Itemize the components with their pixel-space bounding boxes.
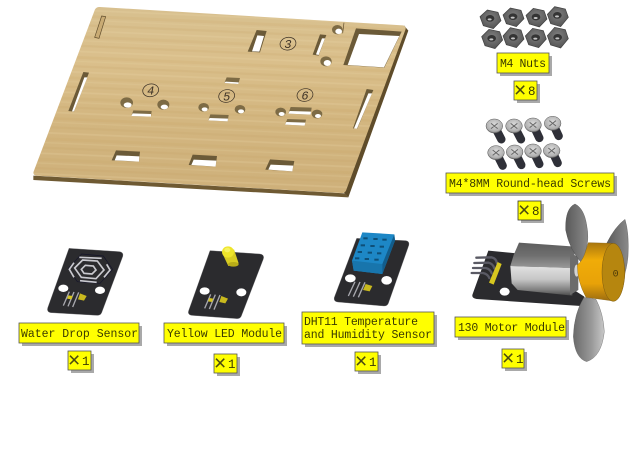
label: M4 Nuts: M4 Nuts <box>500 58 546 71</box>
pins <box>63 292 79 307</box>
header pins <box>472 257 497 278</box>
motor shaft <box>574 265 579 277</box>
M4 nuts <box>480 7 568 49</box>
M4*8MM round-head screws <box>486 116 561 166</box>
yellow LED module <box>188 246 264 319</box>
motor board <box>472 251 584 306</box>
DHT11 sensor <box>334 232 409 306</box>
group 5: 5 <box>223 90 230 104</box>
130 motor module <box>472 243 584 306</box>
label: DHT11 sensor <box>302 312 437 347</box>
label: x1 water <box>68 349 94 373</box>
group 4: 4 <box>147 85 154 99</box>
blade: upper right <box>607 219 628 280</box>
label: x1 DHT11: 1 <box>369 356 377 370</box>
label: x8 screws: × <box>518 199 530 222</box>
blue sensor housing <box>352 232 395 274</box>
label: x8 nuts <box>514 79 540 103</box>
motor rear cap <box>570 253 578 295</box>
label: yellow LED module <box>164 323 287 346</box>
label: x1 water: 1 <box>82 355 90 369</box>
label: x1 motor <box>502 347 527 371</box>
label: x1 motor: 1 <box>516 353 524 367</box>
label: M4*8MM screws: M4*8MM Round-head Screws <box>449 178 611 191</box>
number 3 <box>279 36 297 52</box>
label: DHT11 sensor: and Humidity Sensor <box>304 329 432 342</box>
label: x1 LED: × <box>214 352 226 375</box>
water drop sensor board <box>47 248 123 315</box>
LED bulb <box>222 246 239 267</box>
label: yellow LED module: Yellow LED Module <box>167 328 282 341</box>
label: x1 motor: × <box>502 347 514 370</box>
label: M4*8MM screws <box>446 173 617 196</box>
group 5 <box>198 88 245 121</box>
mounting holes near window <box>320 23 344 66</box>
left long slot <box>68 72 89 112</box>
group 6: 6 <box>301 89 309 103</box>
orange hub <box>577 243 625 301</box>
number 3: 3 <box>284 38 292 52</box>
label: 130 motor module: 130 Motor Module <box>458 322 565 335</box>
bottom slots <box>112 150 294 171</box>
label: x8 screws: 8 <box>532 205 540 219</box>
motor body upper face <box>510 243 575 268</box>
label: x1 LED <box>214 352 240 376</box>
label: x1 water: × <box>68 349 80 372</box>
label: water drop sensor: Water Drop Sensor <box>21 328 138 341</box>
group 6 <box>275 87 322 126</box>
label: M4 Nuts <box>497 53 552 76</box>
blade: bottom <box>573 297 604 362</box>
label: x8 nuts: 8 <box>528 85 536 99</box>
center small slot <box>224 77 240 84</box>
fan propeller and hub: 0 <box>613 268 619 279</box>
label: 130 motor module <box>455 317 569 340</box>
right small slot <box>313 34 326 56</box>
acrylic wooden plate <box>33 7 408 197</box>
group 4 <box>120 82 169 117</box>
thin slot <box>95 16 106 38</box>
label: water drop sensor <box>19 323 142 346</box>
label: x8 nuts: × <box>514 79 526 102</box>
label: x1 DHT11: × <box>355 350 367 373</box>
large square window <box>343 28 402 68</box>
fan propeller and hub <box>566 204 628 362</box>
label: x1 LED: 1 <box>228 358 236 372</box>
motor body lower face <box>510 266 574 296</box>
top slot <box>248 30 267 52</box>
label: DHT11 sensor: DHT11 Temperature <box>304 316 418 329</box>
right long slot <box>353 89 373 129</box>
label: x1 DHT11 <box>355 350 381 374</box>
label: x8 screws <box>518 199 544 223</box>
blade: top <box>566 204 588 265</box>
mounting holes <box>58 285 105 294</box>
sensor web pattern <box>68 254 113 283</box>
